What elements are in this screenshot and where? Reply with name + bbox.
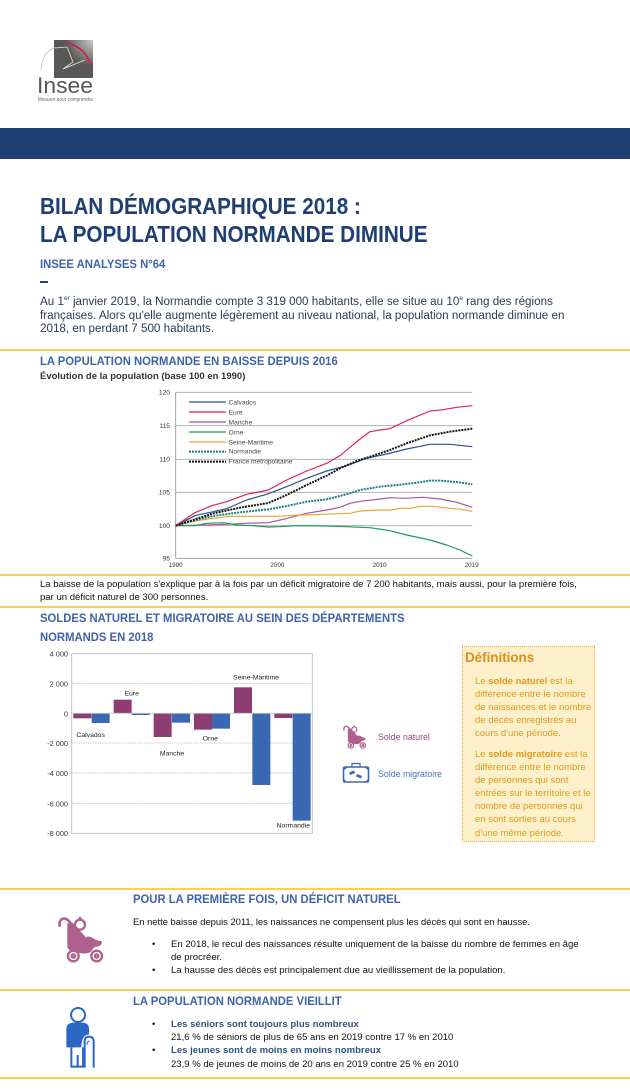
line chart: population xyxy=(159,390,479,569)
dash xyxy=(40,281,48,283)
definition: solde naturel: cours d'une période. xyxy=(475,728,561,739)
definitions heading: Définitions xyxy=(465,650,534,665)
line chart: population: Manche xyxy=(229,419,252,426)
definition: solde migratoire: Le solde migratoire est la xyxy=(475,749,588,760)
title: BILAN DÉMOGRAPHIQUE 2018 : xyxy=(40,193,361,219)
bar chart: soldes: Manche xyxy=(160,750,184,757)
bar chart: soldes: -2 000 xyxy=(47,739,68,748)
text: explanation: par un déficit naturel de 300 personnes. xyxy=(40,592,208,603)
bar chart: soldes: Seine-Maritime xyxy=(233,674,279,681)
title: LA POPULATION NORMANDE DIMINUE xyxy=(40,221,428,247)
definition: solde migratoire: en sont sorties au cours xyxy=(475,814,576,825)
line chart: population: 2019 xyxy=(465,562,479,569)
list: déficit naturel xyxy=(152,939,579,976)
line chart: population: 115 xyxy=(159,423,170,430)
bar chart: soldes: -8 000 xyxy=(47,829,68,838)
icon: senior xyxy=(66,1007,95,1068)
list: population vieillit: 21,6 % de séniors de plus de 65 ans en 2019 contre 17 % en 2010 xyxy=(171,1032,453,1043)
bar chart: soldes xyxy=(47,650,313,838)
list: déficit naturel: • xyxy=(152,965,155,976)
logo: Insee: Mesurer pour comprendre xyxy=(38,97,93,103)
definition: solde migratoire: d'une même période. xyxy=(475,828,564,839)
list: population vieillit: Les jeunes sont de moins en moins nombreux xyxy=(171,1045,381,1056)
list: déficit naturel: • xyxy=(152,939,155,950)
definition: solde naturel: différence entre le nombre xyxy=(475,689,586,700)
definition: solde naturel: de naissances et le nombre xyxy=(475,702,591,713)
bar chart: soldes: -6 000 xyxy=(47,799,68,808)
panel: definitions xyxy=(462,646,595,842)
heading: déficit naturel: POUR LA PREMIÈRE FOIS, UN DÉFICIT NATUREL xyxy=(133,892,401,906)
heading: population vieillit: LA POPULATION NORMANDE VIEILLIT xyxy=(133,994,342,1008)
list: population vieillit: • xyxy=(152,1019,155,1030)
subtitle: INSEE ANALYSES N°64 xyxy=(40,257,165,271)
line chart: population: Calvados xyxy=(229,399,257,406)
list: déficit naturel: La hausse des décès est principalement due au vieillissement de la population. xyxy=(171,965,505,976)
list: population vieillit: • xyxy=(152,1045,155,1056)
list: population vieillit: Les séniors sont toujours plus nombreux xyxy=(171,1019,359,1030)
line chart: population: Seine-Maritime xyxy=(229,439,273,446)
list: déficit naturel: de procréer. xyxy=(171,952,222,963)
intro text xyxy=(40,295,564,335)
definition: solde migratoire: différence entre le nombre xyxy=(475,762,586,773)
bar chart: soldes: 0 xyxy=(64,709,68,718)
list: population vieillit xyxy=(152,1019,459,1070)
intro text: Au 1er janvier 2019, la Normandie compte 3 319 000 habitants, elle se situe au 10e rang des régions xyxy=(40,295,553,308)
line chart: population: France métropolitaine xyxy=(229,459,293,466)
definition: solde naturel: de décès enregistrés au xyxy=(475,715,576,726)
logo: Insee xyxy=(37,40,93,103)
line chart: population: 2010 xyxy=(373,562,387,569)
line chart: population: 1990 xyxy=(169,562,183,569)
legend: solde naturel: Solde naturel xyxy=(378,732,430,742)
icon: stroller legend xyxy=(343,726,366,749)
title xyxy=(40,193,428,247)
bar chart: soldes: -4 000 xyxy=(47,769,68,778)
line chart: population: Orne xyxy=(229,429,244,436)
definition: solde migratoire: nombre de personnes qui xyxy=(475,801,583,812)
definition: solde naturel: Le solde naturel est la xyxy=(475,676,573,687)
heading: soldes xyxy=(40,611,405,644)
bar chart: soldes: Eure xyxy=(124,690,139,697)
list: population vieillit: 23,9 % de jeunes de moins de 20 ans en 2019 contre 25 % en 2010 xyxy=(171,1059,459,1070)
bar chart: soldes: Normandie xyxy=(277,823,310,830)
definition: solde naturel xyxy=(475,676,591,739)
text: déficit naturel: En nette baisse depuis 2011, les naissances ne compensent plus les décès qui sont en hausse. xyxy=(133,916,530,927)
line chart: population: Eure xyxy=(229,409,243,416)
heading: population en baisse: LA POPULATION NORMANDE EN BAISSE DEPUIS 2016 xyxy=(40,354,338,368)
line chart: population: 120 xyxy=(159,390,170,397)
text: explanation xyxy=(40,579,577,603)
intro text: françaises. Alors qu'elle augmente légèrement au niveau national, la population normande diminue en xyxy=(40,308,564,322)
logo: Insee: Insee xyxy=(37,73,93,98)
list: déficit naturel: En 2018, le recul des naissances résulte uniquement de la baisse du nombre de femmes en âge xyxy=(171,939,579,950)
line chart: population: 2000 xyxy=(270,562,285,569)
line chart: population: 110 xyxy=(159,457,170,464)
heading: soldes: SOLDES NATUREL ET MIGRATOIRE AU SEIN DES DÉPARTEMENTS xyxy=(40,611,405,625)
chart subtitle: Évolution de la population (base 100 en 1990) xyxy=(40,371,245,382)
bar chart: soldes: 2 000 xyxy=(50,679,68,688)
line chart: population: 105 xyxy=(159,490,170,497)
line chart: population: 100 xyxy=(159,523,170,530)
line chart: population: 95 xyxy=(163,556,170,563)
banner xyxy=(0,128,630,159)
bar chart: soldes: Orne xyxy=(203,736,218,743)
legend: solde migratoire: Solde migratoire xyxy=(378,769,442,779)
definition: solde migratoire: de personnes qui sont xyxy=(475,775,568,786)
bar chart: soldes: 4 000 xyxy=(50,650,68,659)
definition: solde migratoire xyxy=(475,749,591,839)
definition: solde migratoire: entrées sur le territoire et le xyxy=(475,788,591,799)
text: explanation: La baisse de la population s'explique par à la fois par un déficit migratoire de 7 200 habitants, mais aussi, pour la première fois, xyxy=(40,579,577,590)
bar chart: soldes: Calvados xyxy=(76,732,105,739)
intro text: 2018, en perdant 7 500 habitants. xyxy=(40,322,214,335)
heading: soldes: NORMANDS EN 2018 xyxy=(40,630,153,644)
icon: stroller xyxy=(58,916,104,962)
icon: suitcase legend xyxy=(342,762,370,783)
line chart: population: Normandie xyxy=(229,449,261,456)
